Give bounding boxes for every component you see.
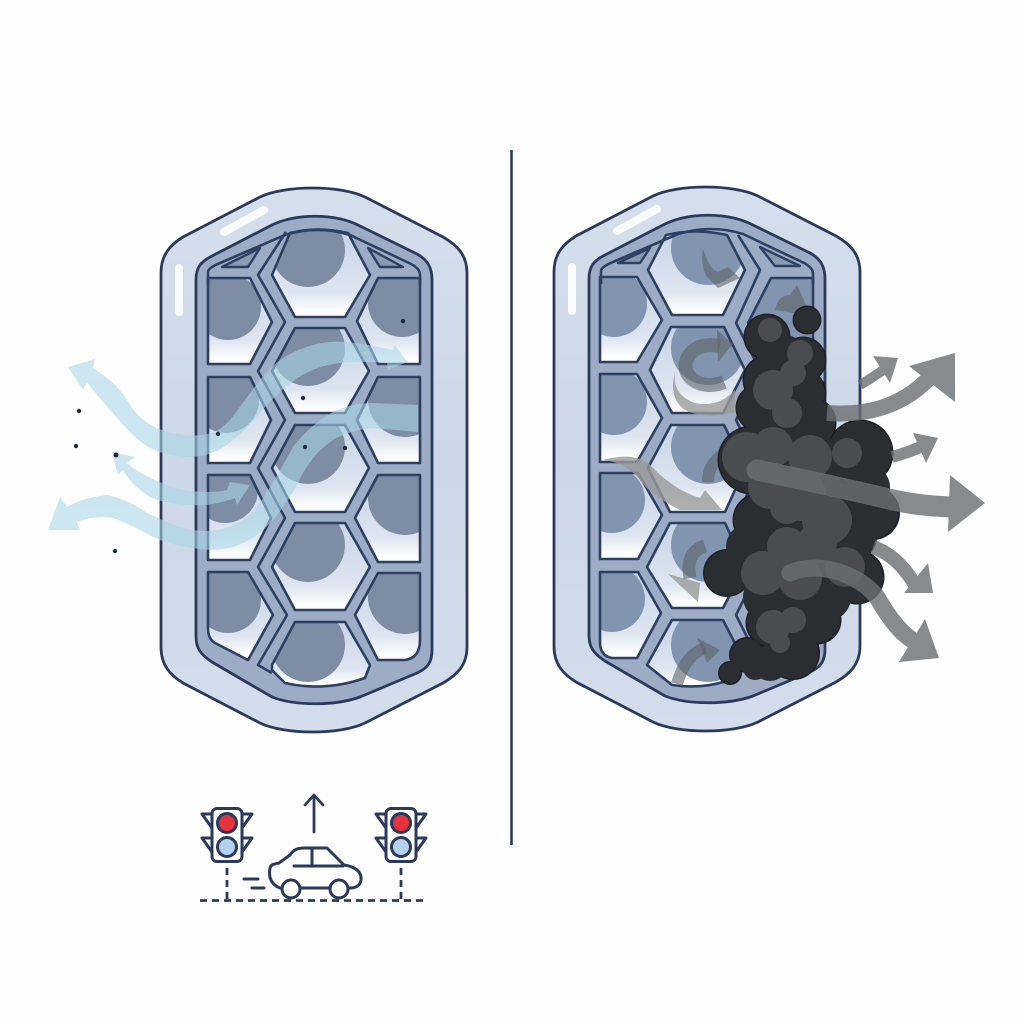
icon: car <box>244 848 361 898</box>
honeycomb cells <box>206 228 422 688</box>
dust particles <box>74 319 405 553</box>
smoke cloud <box>703 306 900 685</box>
infographic illustration <box>48 150 985 902</box>
filter housing <box>161 188 467 732</box>
icon: up arrow <box>305 795 323 832</box>
filter housing, clogged side <box>554 187 860 731</box>
icon: left traffic light <box>202 808 252 862</box>
center divider <box>510 150 513 845</box>
internal swirling grey arrows <box>603 248 806 684</box>
traffic scene icon <box>200 795 426 900</box>
panel: clean filter (left) <box>48 188 467 732</box>
icon: right traffic light <box>376 808 426 862</box>
airflow arrows: clean air <box>48 342 418 550</box>
panel: clogged filter (right) <box>554 187 985 731</box>
honeycomb cells, clogged side <box>598 228 814 688</box>
road and dashed connectors <box>200 868 426 900</box>
outflow arrows: dirty air <box>757 353 985 662</box>
